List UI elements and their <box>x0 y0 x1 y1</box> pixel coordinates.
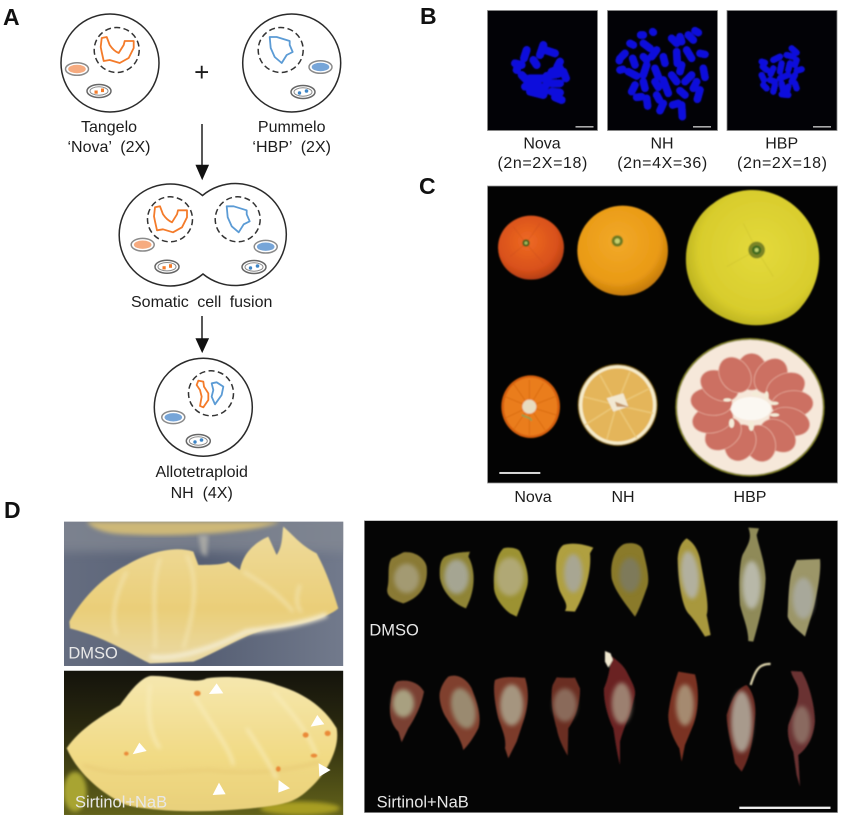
label: NH karyotype <box>617 136 708 172</box>
label: Pummelo HBP <box>252 119 331 156</box>
scale bar <box>499 472 540 474</box>
label: Pummelo HBP: Pummelo <box>258 119 326 136</box>
label: NH: NH <box>611 489 635 506</box>
micrograph: NH <box>608 10 718 130</box>
label: Sirtinol+NaB: Sirtinol+NaB <box>75 794 167 812</box>
label: NH karyotype: (2n=4X=36) <box>617 155 708 172</box>
photo: DMSO segment <box>64 522 344 666</box>
cell: pummelo HBP <box>243 14 341 112</box>
fruit: whole Nova <box>498 216 564 280</box>
cell: tangelo Nova <box>61 14 159 112</box>
panel D: treated fruit segments <box>53 515 838 815</box>
label: Tangelo Nova <box>68 119 150 156</box>
fruit: cut NH <box>578 364 658 446</box>
cell: fused cell <box>119 184 286 286</box>
label: HBP karyotype <box>737 136 828 172</box>
label: Nova karyotype <box>497 136 588 172</box>
photo: arils <box>364 521 838 813</box>
scale bar <box>739 807 831 809</box>
label: HBP: HBP <box>734 489 766 506</box>
plus sign: + <box>194 57 209 87</box>
label: Tangelo Nova: Tangelo <box>81 119 137 136</box>
label: Nova karyotype: Nova <box>523 136 561 152</box>
label: HBP karyotype: (2n=2X=18) <box>737 155 828 172</box>
panel A: somatic fusion schematic <box>61 14 341 502</box>
panel label D: D <box>4 497 21 523</box>
DMSO arils row <box>387 528 820 642</box>
panel B: chromosome images <box>488 10 837 172</box>
label: DMSO: DMSO <box>68 644 118 662</box>
label: allotetraploid NH <box>155 464 248 502</box>
label: DMSO: DMSO <box>369 622 419 640</box>
fruit: cut HBP <box>675 338 825 477</box>
arrow: to fusion <box>196 124 208 178</box>
label: Pummelo HBP: ‘HBP’ (2X) <box>252 139 331 156</box>
fruit: cut Nova <box>501 375 560 438</box>
photo: Sirtinol+NaB segment <box>63 671 343 815</box>
label: NH karyotype: NH <box>650 136 674 152</box>
label: somatic cell fusion: Somatic cell fusion <box>131 294 272 311</box>
cell: allotetraploid <box>154 358 252 456</box>
label: Nova karyotype: (2n=2X=18) <box>497 155 588 172</box>
label: Tangelo Nova: ‘Nova’ (2X) <box>68 139 150 156</box>
panel label C: C <box>419 173 436 199</box>
panel label A: A <box>3 4 20 30</box>
label: allotetraploid NH: Allotetraploid <box>155 464 248 481</box>
fruit: whole NH <box>577 206 668 296</box>
arrowheads <box>133 683 331 795</box>
panel label B: B <box>420 3 437 29</box>
panel C: fruit photographs <box>488 186 838 506</box>
micrograph: HBP <box>727 10 837 130</box>
label: allotetraploid NH: NH (4X) <box>171 485 233 502</box>
Sirtinol+NaB arils row <box>390 651 815 787</box>
label: Sirtinol+NaB: Sirtinol+NaB <box>377 794 469 812</box>
photo background <box>488 186 838 483</box>
fruit: whole HBP <box>686 190 819 325</box>
arrow: to allotetraploid <box>196 316 208 352</box>
label: HBP karyotype: HBP <box>765 136 798 152</box>
label: Nova: Nova <box>514 489 552 506</box>
micrograph: Nova <box>488 10 598 130</box>
